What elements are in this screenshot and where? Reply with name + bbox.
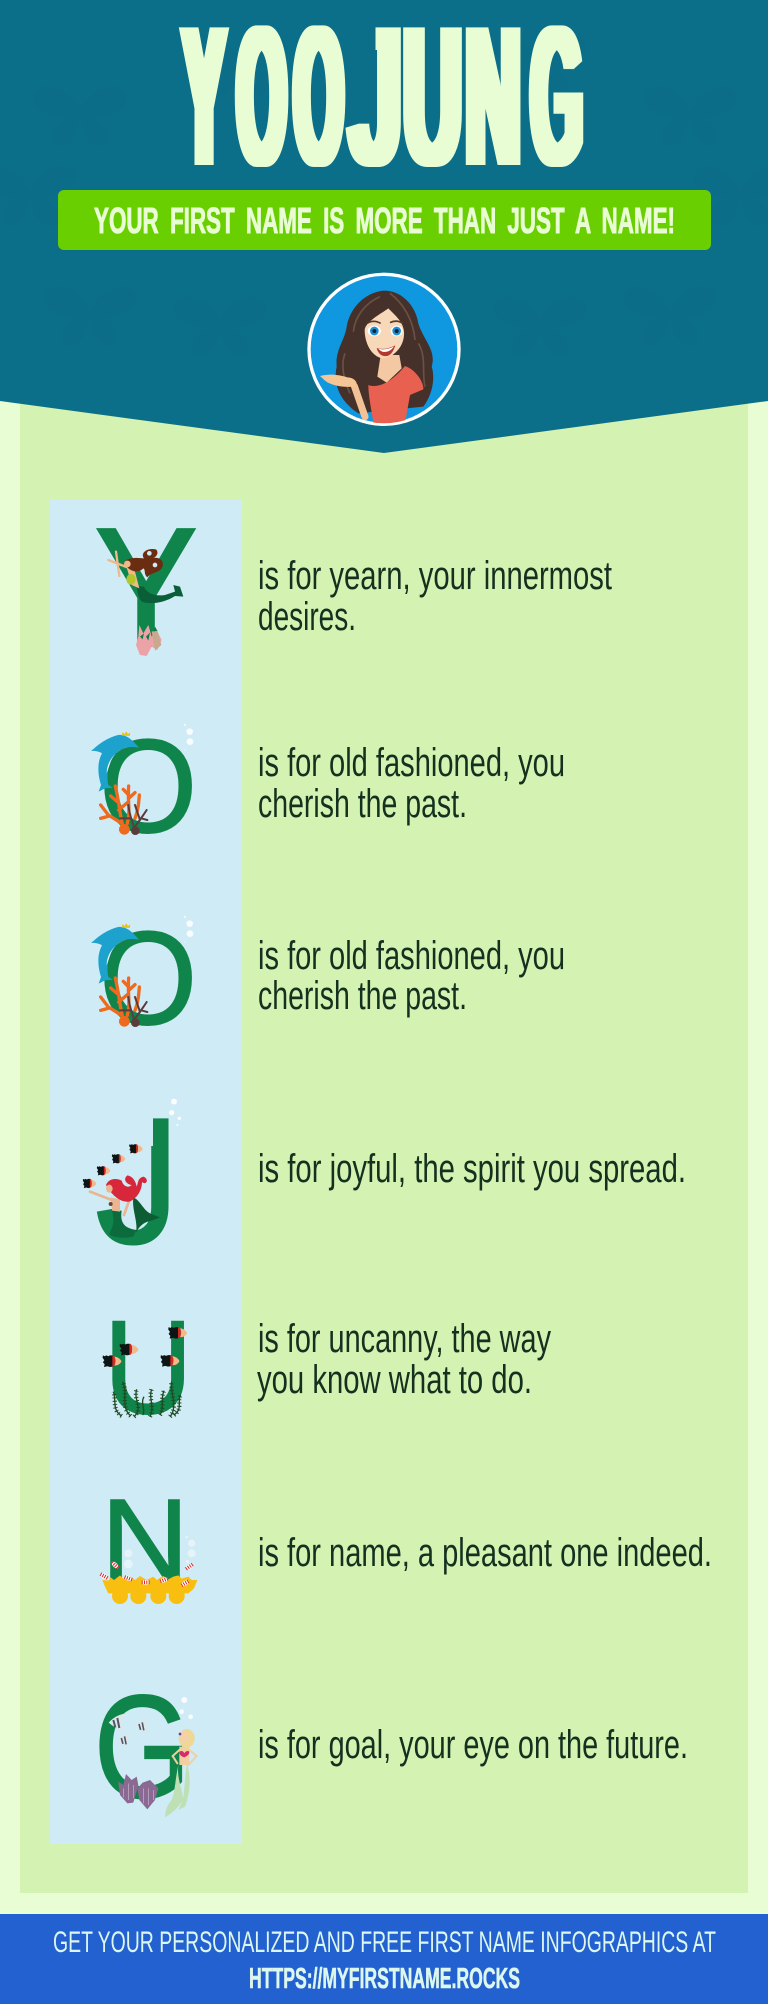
text: second O line: cherish the past. bbox=[258, 974, 467, 1018]
text: Y line bbox=[258, 554, 612, 639]
footer band bbox=[0, 1914, 768, 2004]
text: U line: is for uncanny, the way bbox=[258, 1317, 551, 1361]
icon: mermaid and pink coral bbox=[108, 549, 183, 656]
row: letter G bbox=[94, 1664, 197, 1828]
icon: yellow coral, striped fish and bubbles bbox=[99, 1536, 197, 1604]
text: U line: you know what to do. bbox=[257, 1358, 532, 1402]
row: letter O bbox=[91, 713, 197, 861]
banner: subtitle bbox=[58, 190, 711, 250]
row: letter J bbox=[83, 1081, 181, 1282]
letter O: O bbox=[99, 713, 197, 861]
text: Y line: desires. bbox=[258, 595, 356, 639]
letter J: J bbox=[95, 1081, 181, 1282]
row: letter Y bbox=[96, 494, 196, 681]
text: second O line bbox=[258, 934, 565, 1018]
row: second letter O bbox=[91, 905, 197, 1053]
title bbox=[183, 0, 582, 209]
text: O line: cherish the past. bbox=[258, 782, 467, 826]
letter N: N bbox=[101, 1476, 189, 1605]
icon: angelfish, blonde mermaid and purple coral bbox=[109, 1697, 197, 1817]
letter Y: Y bbox=[96, 494, 196, 681]
panel: pale green content panel bbox=[20, 395, 748, 1893]
letter G: G bbox=[94, 1664, 191, 1828]
icon: dolphin and orange coral bbox=[91, 916, 193, 1027]
panel: teal header with chevron bbox=[0, 0, 768, 453]
icon: fish and seaweed bbox=[103, 1327, 187, 1417]
row: letter U bbox=[103, 1294, 193, 1442]
icon: red mermaid and fish bbox=[83, 1099, 181, 1238]
text: O line: is for old fashioned, you bbox=[258, 741, 565, 785]
text: U line bbox=[257, 1317, 551, 1402]
text: O line bbox=[258, 741, 565, 826]
icon: woman portrait in circle bbox=[307, 273, 461, 426]
footer text: url: HTTPS://MYFIRSTNAME.ROCKS bbox=[249, 1963, 520, 1995]
panel: blue letter column bbox=[50, 500, 242, 1844]
text: Y line: is for yearn, your innermost bbox=[258, 554, 612, 598]
letter O: O bbox=[99, 905, 197, 1053]
row: letter N bbox=[99, 1476, 197, 1605]
text: second O line: is for old fashioned, you bbox=[258, 934, 565, 978]
letter U: U bbox=[104, 1294, 193, 1442]
icon: dolphin and orange coral bbox=[91, 724, 193, 835]
